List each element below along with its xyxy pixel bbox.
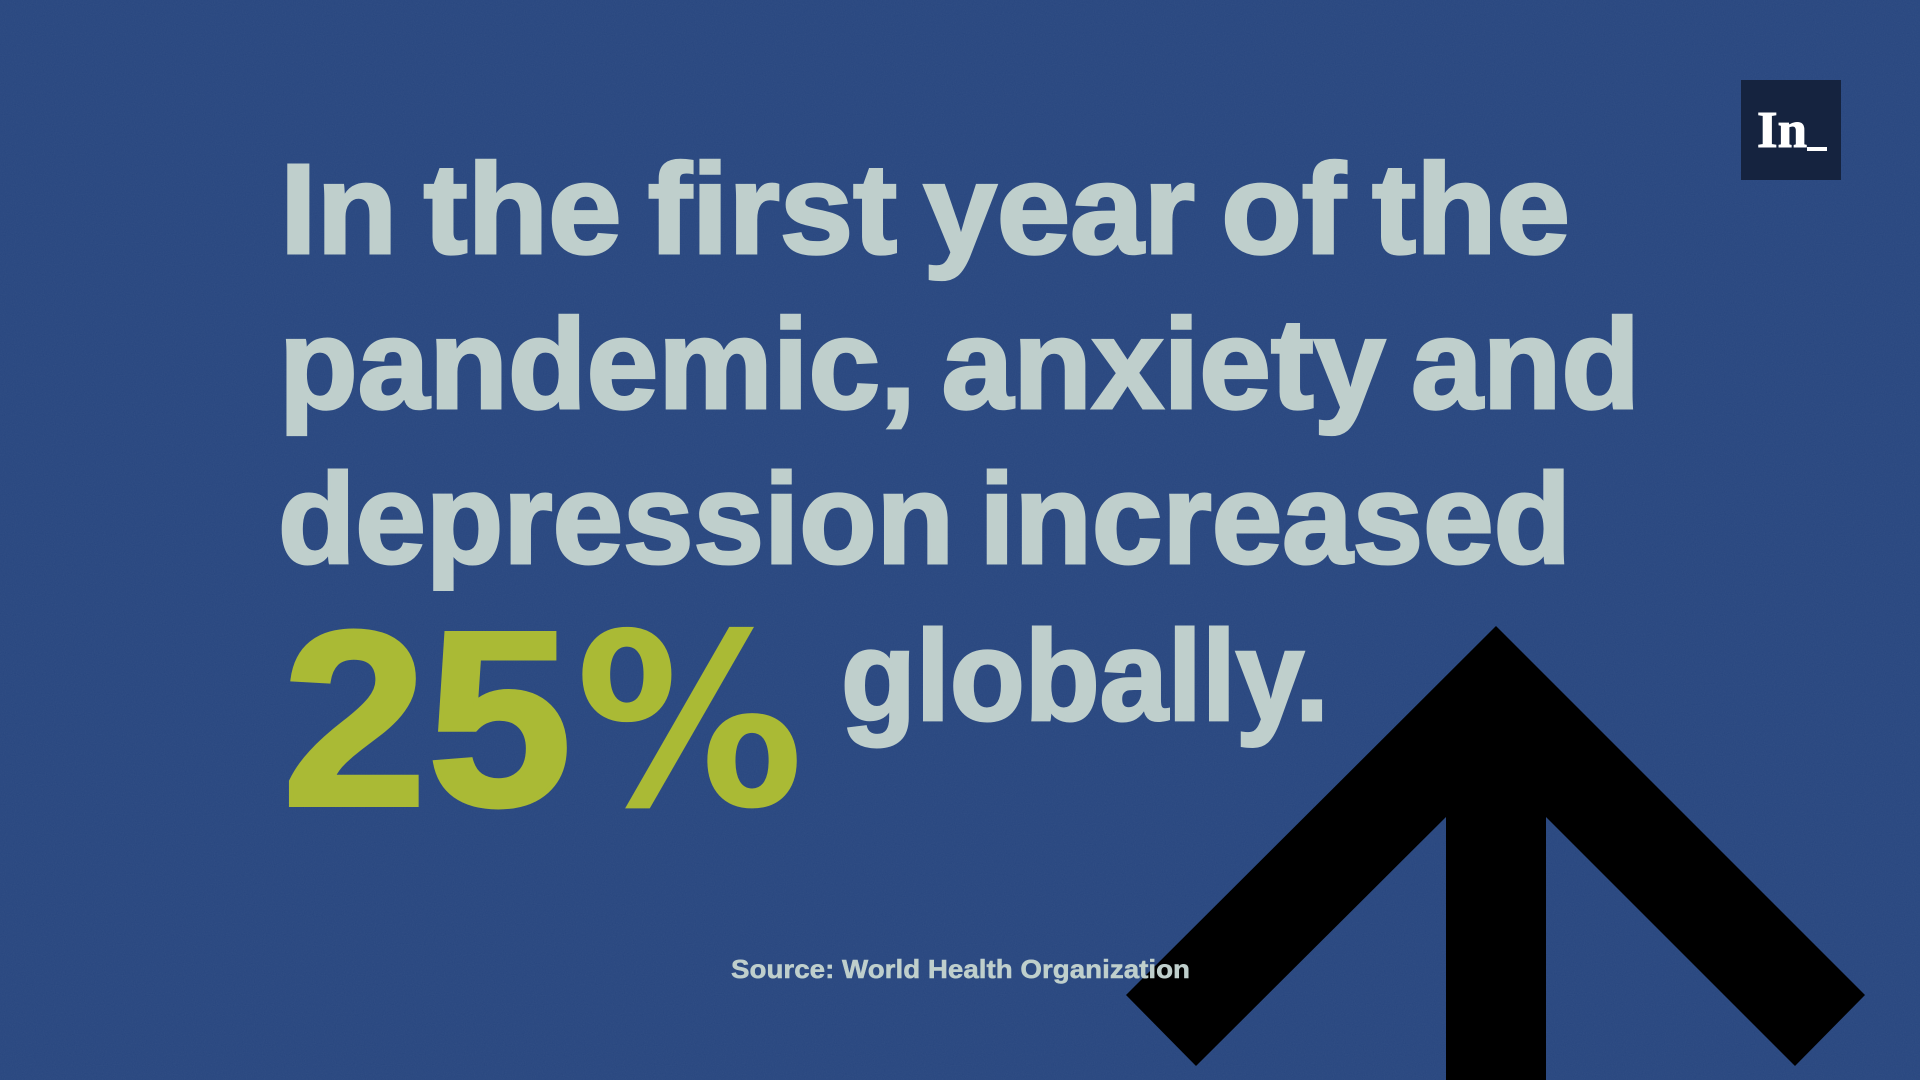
icon: upward arrow [1126,626,1865,1080]
headline line 2: pandemic, anxiety and [279,293,1640,436]
key figure: 25% [282,579,804,862]
logo: In_: In [1757,102,1807,159]
headline [278,138,1640,748]
source line: Source: World Health Organization [731,954,1190,984]
digits 25: 25 [282,579,572,858]
percent sign: % [575,582,804,862]
logo: In_ [1741,80,1841,180]
headline line 3: depression increased [278,448,1571,591]
headline line 4: globally: globally. [841,605,1329,748]
headline line 1: In the first year of the [280,138,1570,281]
